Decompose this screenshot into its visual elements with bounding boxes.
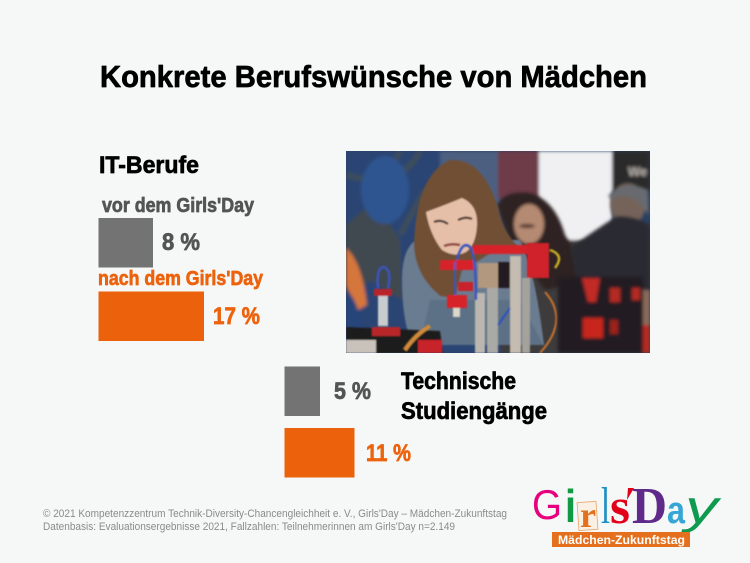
logo apostrophe bbox=[627, 488, 634, 500]
foreground small model left bbox=[346, 267, 443, 353]
title: Konkrete Berufswünsche von Mädchen bbox=[100, 59, 647, 94]
logo letter y: y bbox=[681, 481, 722, 533]
logo letter i: i bbox=[565, 480, 576, 532]
value: 5 %: 5 % bbox=[334, 378, 371, 405]
photo: girl at a technical model: We bbox=[628, 164, 647, 179]
man in the background bbox=[570, 183, 650, 290]
3D printer model bbox=[440, 243, 559, 353]
main girl bbox=[402, 160, 544, 345]
logo banner bbox=[552, 532, 690, 547]
value: 11 %: 11 % bbox=[366, 440, 411, 467]
panel: IT-Berufe bbox=[98, 152, 264, 341]
heading: Technische Studiengänge: Studiengänge bbox=[401, 398, 547, 425]
logo letter D: D bbox=[632, 478, 667, 535]
bar: 11 % bbox=[284, 428, 354, 478]
logo: Girls'Day Mädchen-Zukunftstag bbox=[532, 478, 722, 547]
panel: Technische Studiengänge bbox=[284, 366, 547, 478]
label: nach dem Girls'Day: nach dem Girls'Day bbox=[98, 268, 264, 290]
label: vor dem Girls'Day: vor dem Girls'Day bbox=[102, 195, 255, 217]
source note bbox=[43, 508, 507, 533]
logo letter r tile: r bbox=[580, 495, 596, 535]
background girl bbox=[497, 192, 582, 290]
logo letter G: G bbox=[532, 481, 562, 528]
foreground dark machine bbox=[558, 277, 650, 353]
bar: 5 % bbox=[284, 366, 320, 416]
logo letter s: s bbox=[610, 478, 630, 534]
logo banner text: Mädchen-Zukunftstag bbox=[558, 533, 685, 547]
source note: Datenbasis: Evaluationsergebnisse 2021, Fallzahlen: Teilnehmerinnen am Girls'Day n=2.149 bbox=[43, 521, 455, 533]
value: 17 %: 17 % bbox=[213, 303, 260, 330]
bar: 17 % bbox=[98, 292, 204, 341]
heading: Technische Studiengänge: Technische bbox=[401, 368, 516, 395]
logo letter a: a bbox=[667, 490, 686, 532]
photo: girl at a technical model bbox=[346, 151, 650, 353]
source note: © 2021 Kompetenzzentrum Technik-Diversity-Chancengleichheit e. V., Girls'Day – Mädchen-Zukunftstag bbox=[43, 508, 507, 520]
heading: IT-Berufe: IT-Berufe bbox=[99, 152, 199, 179]
bar: 8 % bbox=[98, 218, 153, 268]
logo letter l: l bbox=[601, 478, 610, 535]
value: 8 %: 8 % bbox=[162, 229, 200, 256]
